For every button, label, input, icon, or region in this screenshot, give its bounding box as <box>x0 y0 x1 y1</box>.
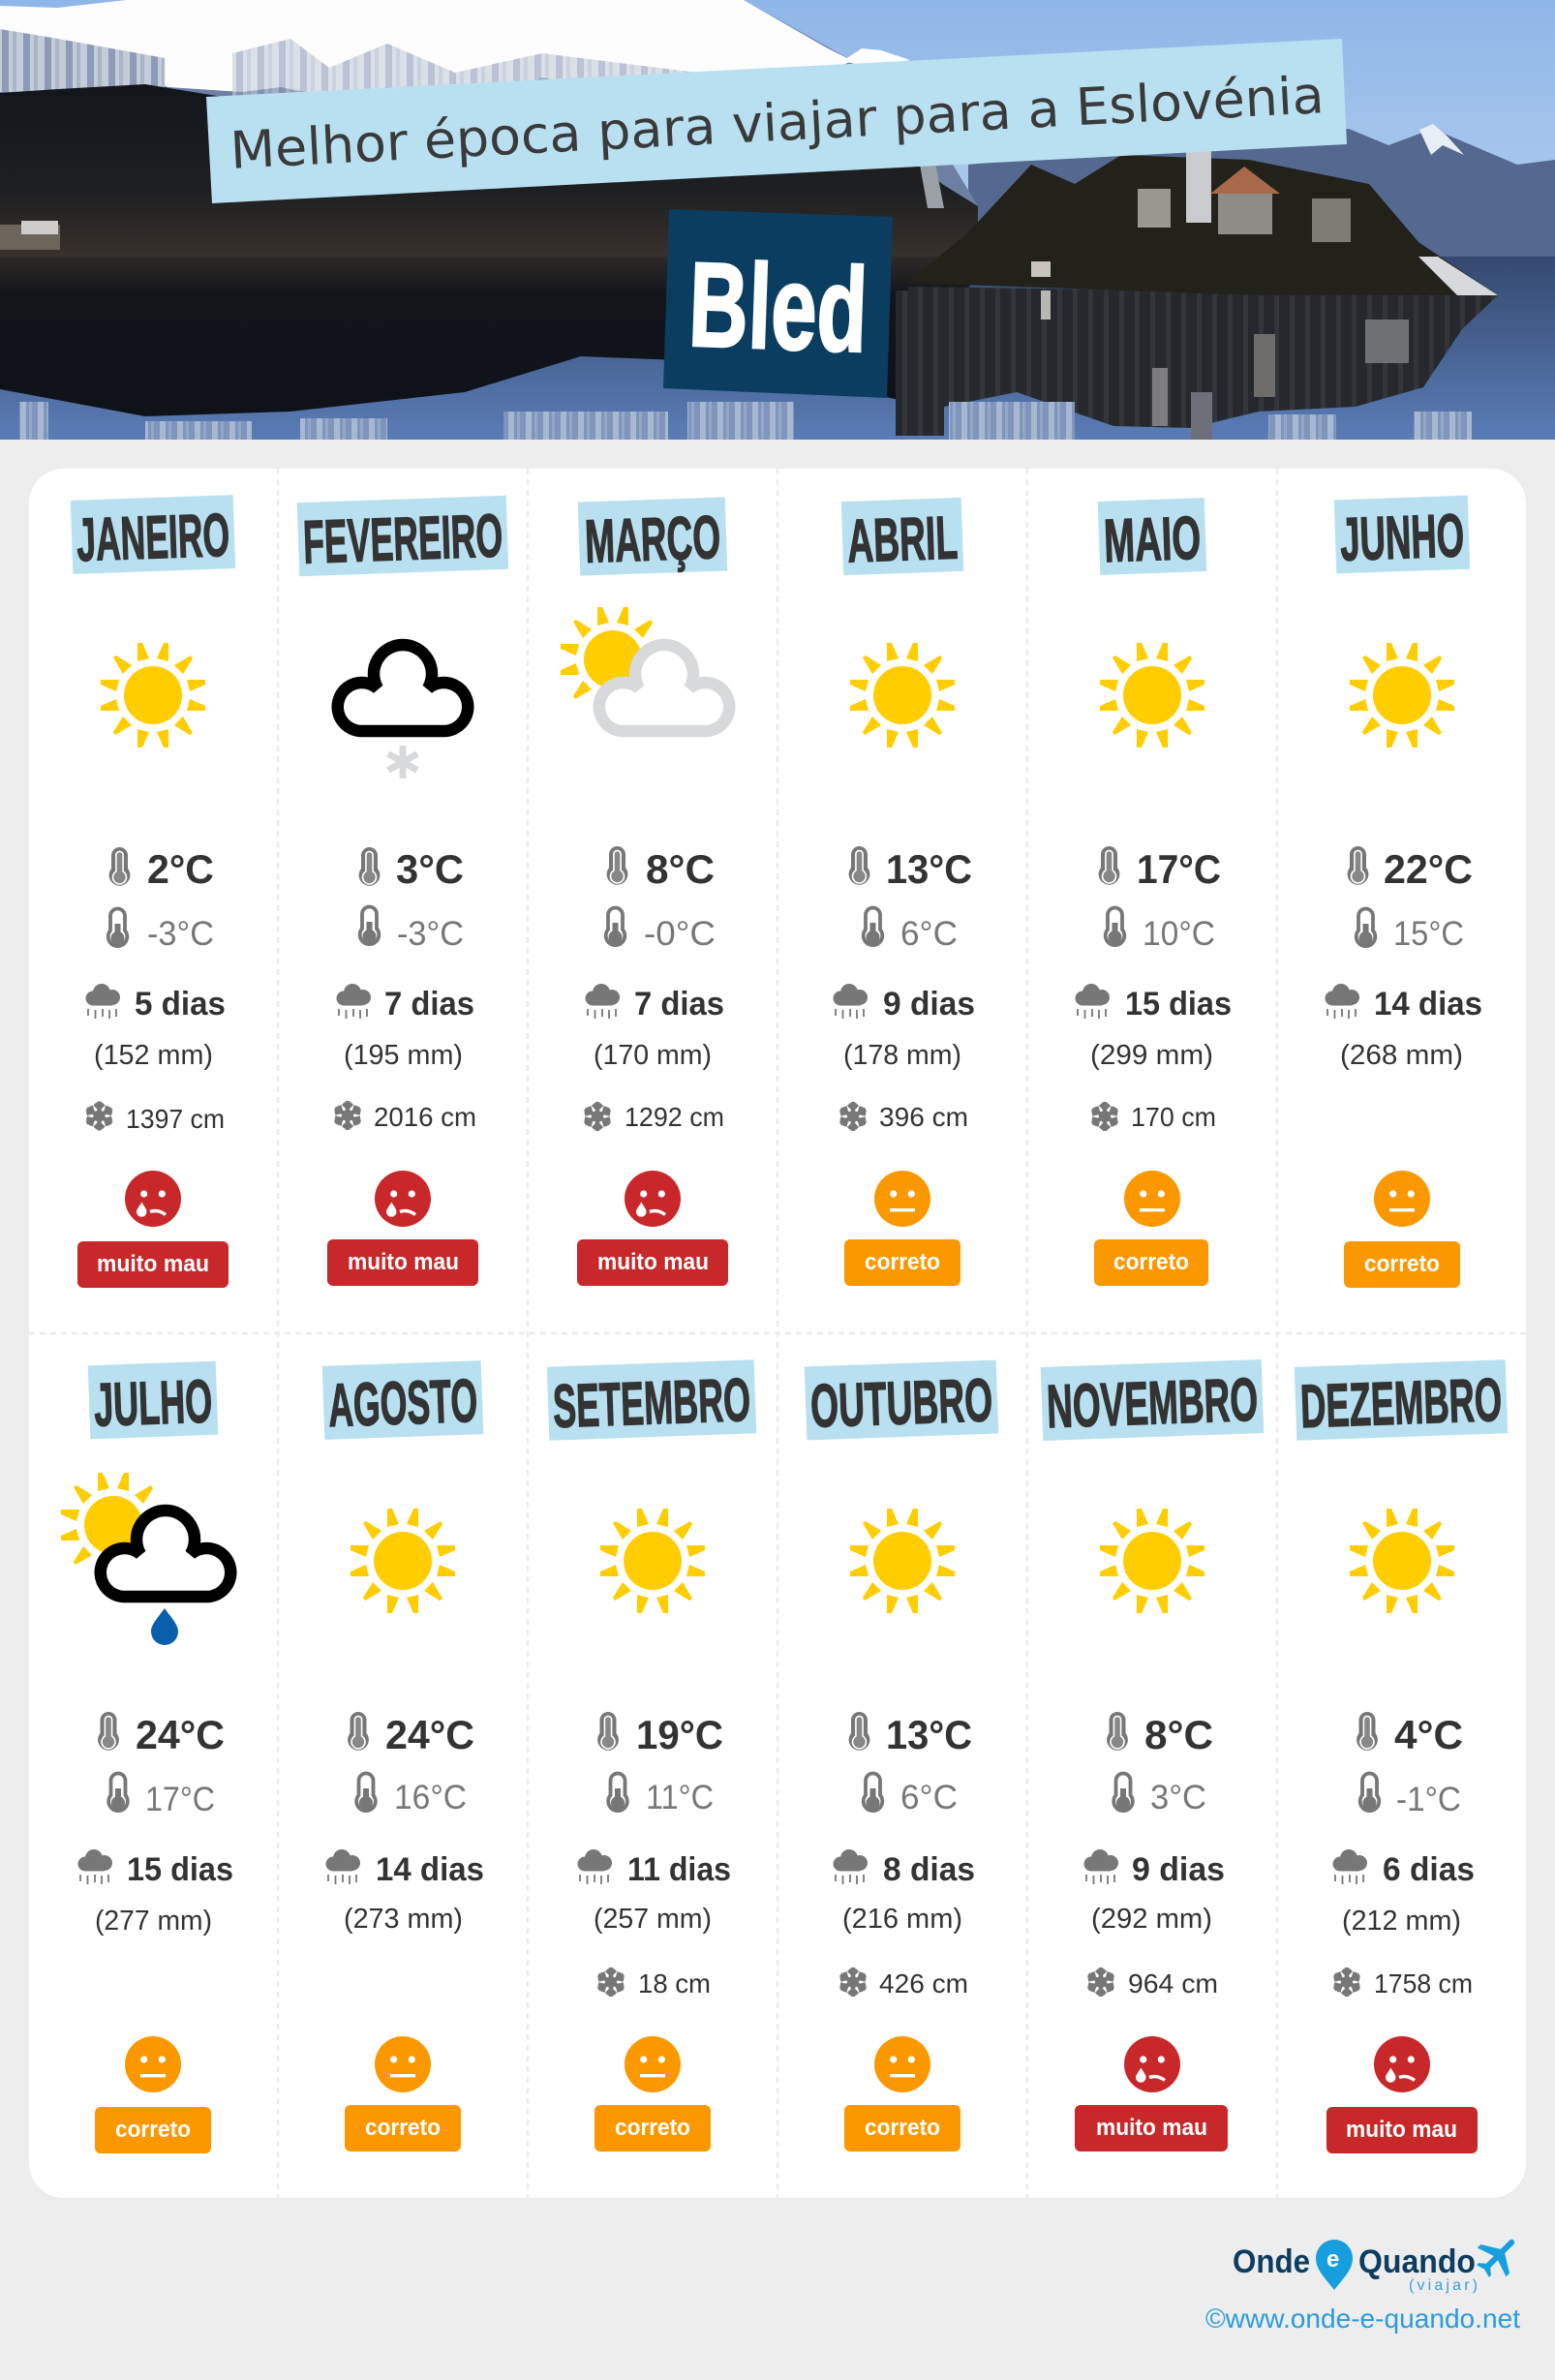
rain days: 5 dias <box>135 986 226 1022</box>
rainfall: (299 mm) <box>1090 1040 1213 1071</box>
min temperature <box>1113 1774 1206 1816</box>
rainfall: (292 mm) <box>1091 1904 1212 1935</box>
snowfall <box>84 1102 225 1134</box>
rain days <box>337 984 474 1022</box>
min temperature <box>1357 908 1464 953</box>
rain days <box>1084 1849 1225 1888</box>
min temperature: -0°C <box>644 915 716 953</box>
month label: Outubro: OUTUBRO <box>809 1366 993 1441</box>
snowfall: 1292 cm <box>625 1102 724 1132</box>
rain days <box>833 1849 975 1888</box>
max temperature <box>597 1712 723 1757</box>
min temperature <box>1360 1774 1461 1818</box>
max temperature: 4°C <box>1394 1712 1463 1757</box>
icon: sun <box>1350 643 1454 748</box>
rain days: 11 dias <box>627 1851 731 1888</box>
rating badge <box>844 2105 960 2151</box>
max temperature <box>109 846 214 892</box>
snowfall: 396 cm <box>879 1102 968 1132</box>
icon: rating face <box>125 1171 181 1227</box>
month label: Abril <box>841 498 963 576</box>
snowfall <box>838 1968 968 1999</box>
max temperature <box>1107 1712 1213 1757</box>
max temperature <box>849 846 972 892</box>
max temperature <box>849 1712 972 1757</box>
icon: sun <box>1350 1509 1454 1613</box>
icon: map pin <box>1316 2240 1353 2290</box>
rating badge <box>595 2105 711 2151</box>
month label: Maio <box>1098 498 1206 575</box>
snowfall <box>583 1102 724 1132</box>
max temperature: 17°C <box>1137 846 1221 892</box>
icon: map pin: e <box>1326 2246 1339 2273</box>
snowfall <box>838 1102 968 1132</box>
rain days: 6 dias <box>1383 1851 1475 1888</box>
rain days <box>77 1849 233 1888</box>
panel: Fevereiro <box>297 496 508 1286</box>
city name banner: Bled <box>663 209 893 398</box>
rating badge <box>1326 2107 1478 2153</box>
footer logo: Onde e Quando: Onde <box>1233 2243 1310 2280</box>
month label: Setembro: SETEMBRO <box>552 1366 751 1441</box>
max temperature: 3°C <box>396 846 464 892</box>
icon: sun <box>101 643 205 748</box>
snowfall: 426 cm <box>879 1968 968 1999</box>
header photo: Lake Bled <box>0 0 1555 440</box>
icon: rating face <box>625 2036 681 2092</box>
panel: Janeiro <box>71 495 235 1288</box>
panel: Março <box>561 497 729 1286</box>
max temperature <box>348 1712 474 1757</box>
rain days: 14 dias <box>1374 986 1482 1022</box>
rainfall: (268 mm) <box>1340 1040 1463 1071</box>
icon: rating face <box>1374 2036 1430 2092</box>
month label: Outubro <box>805 1360 998 1441</box>
snowfall <box>1090 1102 1216 1132</box>
rating badge <box>345 2105 461 2151</box>
rainfall: (273 mm) <box>344 1904 463 1935</box>
rain days: 14 dias <box>376 1851 484 1888</box>
snowfall: 170 cm <box>1131 1102 1216 1132</box>
panel: months card <box>29 469 1526 2198</box>
rain days <box>1332 1849 1475 1888</box>
rating badge: correto <box>365 2115 441 2141</box>
month label: Março <box>578 497 727 576</box>
rating badge: correto <box>865 2115 940 2141</box>
title banner: Melhor época para viajar para a Eslovénia <box>229 66 1326 181</box>
icon: sun <box>850 643 955 748</box>
min temperature: 17°C <box>145 1781 215 1818</box>
snowfall <box>1086 1968 1218 1999</box>
footer logo: Onde e Quando: Quando <box>1358 2243 1476 2280</box>
max temperature: 8°C <box>1144 1712 1213 1757</box>
max temperature <box>1099 846 1221 892</box>
icon: sun <box>600 1509 705 1613</box>
icon: rating face <box>375 1171 431 1227</box>
rating badge <box>327 1239 478 1286</box>
icon: rating face <box>874 1171 930 1227</box>
month label: Fevereiro: FEVEREIRO <box>302 502 503 577</box>
month label: Agosto: AGOSTO <box>327 1367 478 1440</box>
rating badge: correto <box>1364 1251 1440 1277</box>
min temperature: -3°C <box>397 915 464 953</box>
snowfall <box>1332 1968 1473 1999</box>
rainfall: (277 mm) <box>95 1906 212 1937</box>
rainfall: (195 mm) <box>344 1040 463 1071</box>
rain days: 8 dias <box>883 1851 975 1888</box>
icon: sun and grey cloud <box>561 607 729 731</box>
panel: Setembro <box>547 1359 756 2151</box>
rating badge: muito mau <box>97 1251 209 1277</box>
min temperature: 3°C <box>1150 1779 1206 1816</box>
min temperature: -3°C <box>147 915 214 953</box>
rain days <box>1325 984 1482 1022</box>
rating badge: correto <box>115 2117 191 2143</box>
icon: sun <box>1100 643 1204 748</box>
month label: Novembro: NOVEMBRO <box>1046 1366 1259 1441</box>
month label: Fevereiro <box>297 496 508 577</box>
icon: rating face <box>874 2036 930 2092</box>
footer logo: Onde e Quando <box>1233 2226 1528 2294</box>
max temperature: 19°C <box>636 1712 723 1757</box>
rain days <box>833 984 975 1022</box>
panel: Agosto <box>322 1360 484 2151</box>
rain days: 9 dias <box>1132 1851 1225 1888</box>
min temperature <box>356 1774 467 1816</box>
max temperature: 24°C <box>385 1712 474 1757</box>
rating badge <box>1094 1239 1208 1286</box>
max temperature: 8°C <box>646 846 715 892</box>
snowfall: 1758 cm <box>1374 1968 1473 1999</box>
rain days: 15 dias <box>1125 986 1232 1022</box>
icon: rating face <box>1124 1171 1180 1227</box>
min temperature: 11°C <box>646 1779 714 1816</box>
min temperature <box>1106 908 1215 953</box>
min temperature <box>108 908 214 953</box>
panel: Novembro <box>1041 1359 1264 2151</box>
title banner <box>206 39 1347 203</box>
min temperature <box>360 906 464 953</box>
min temperature <box>108 1774 215 1818</box>
rating badge <box>577 1239 728 1286</box>
rain days <box>1075 984 1232 1022</box>
icon: rating face <box>1374 1171 1430 1227</box>
rating badge: muito mau <box>597 1249 709 1275</box>
rating badge <box>77 1241 229 1288</box>
panel: Dezembro <box>1295 1359 1508 2153</box>
max temperature: 13°C <box>886 1712 972 1757</box>
month label: Janeiro <box>71 495 235 574</box>
min temperature <box>864 1774 958 1816</box>
month label: Novembro <box>1041 1359 1264 1441</box>
panel: Julho <box>61 1361 233 2153</box>
rating badge: muito mau <box>1346 2117 1457 2143</box>
min temperature: 6°C <box>900 1779 958 1816</box>
rain days: 9 dias <box>883 986 975 1022</box>
rainfall: (212 mm) <box>1342 1906 1461 1937</box>
min temperature: 15°C <box>1393 915 1464 953</box>
snowfall <box>596 1968 711 1999</box>
icon: rating face <box>625 1171 681 1227</box>
rating badge <box>1075 2105 1228 2151</box>
rainfall: (257 mm) <box>594 1904 712 1935</box>
icon: rating face <box>125 2036 181 2092</box>
rating badge <box>1344 1241 1460 1288</box>
panel: Outubro <box>805 1360 998 2151</box>
city name banner: Bled: Bled <box>686 238 869 378</box>
website credit: ©www.onde-e-quando.net <box>1205 2304 1520 2334</box>
rating badge: correto <box>1113 1249 1189 1275</box>
panel: Junho <box>1325 496 1482 1288</box>
icon: cloud with snow <box>338 645 468 778</box>
rain days <box>325 1849 484 1888</box>
icon: sun <box>351 1509 455 1613</box>
rating badge: muito mau <box>1096 2115 1207 2141</box>
min temperature: -1°C <box>1396 1781 1461 1818</box>
min temperature: 16°C <box>394 1779 467 1816</box>
icon: airplane <box>1469 2226 1528 2285</box>
month label: Maio: MAIO <box>1103 504 1202 575</box>
snowfall: 1397 cm <box>126 1104 225 1134</box>
max temperature: 22°C <box>1384 846 1473 892</box>
min temperature <box>606 908 716 953</box>
icon: rating face <box>1124 2036 1180 2092</box>
rating badge: muito mau <box>348 1249 459 1275</box>
min temperature <box>608 1774 714 1816</box>
max temperature <box>359 846 464 892</box>
rating badge <box>844 1239 960 1286</box>
panel: Abril <box>833 498 975 1286</box>
month label: Janeiro: JANEIRO <box>76 502 230 574</box>
max temperature: 13°C <box>886 846 972 892</box>
panel: Maio <box>1075 498 1232 1286</box>
max temperature <box>98 1712 225 1757</box>
rating badge: correto <box>865 1249 940 1275</box>
icon: sun <box>850 1509 955 1613</box>
rain days <box>85 984 226 1022</box>
rain days: 7 dias <box>384 986 474 1022</box>
snowfall: 964 cm <box>1128 1968 1218 1999</box>
month label: Março: MARÇO <box>584 503 721 576</box>
max temperature: 24°C <box>136 1712 225 1757</box>
rainfall: (178 mm) <box>843 1040 961 1071</box>
month label: Junho: JUNHO <box>1339 502 1465 574</box>
footer logo: Onde e Quando: (viajar) <box>1409 2277 1478 2294</box>
snowfall <box>333 1101 476 1132</box>
month label: Agosto <box>322 1360 483 1440</box>
max temperature: 2°C <box>147 846 214 892</box>
rain days <box>577 1849 731 1888</box>
icon: rating face <box>375 2036 431 2092</box>
month label: Setembro <box>547 1359 756 1441</box>
icon: sun <box>1100 1509 1204 1613</box>
rainfall: (170 mm) <box>594 1040 712 1071</box>
month label: Junho <box>1334 496 1470 574</box>
min temperature: 10°C <box>1143 915 1215 953</box>
snowfall: 2016 cm <box>374 1102 476 1132</box>
rainfall: (216 mm) <box>842 1904 962 1935</box>
rating badge: correto <box>615 2115 690 2141</box>
month label: Julho <box>88 1361 218 1440</box>
min temperature <box>864 908 958 953</box>
rating badge <box>95 2107 211 2153</box>
rain days: 7 dias <box>634 986 724 1022</box>
icon: sun, cloud and rain drop <box>61 1473 230 1645</box>
rainfall: (152 mm) <box>94 1040 213 1071</box>
max temperature <box>1357 1712 1463 1757</box>
snowfall: 18 cm <box>638 1968 711 1999</box>
month label: Abril: ABRIL <box>846 504 959 575</box>
rain days <box>585 984 724 1022</box>
month label: Julho: JULHO <box>93 1367 213 1440</box>
max temperature <box>607 846 715 892</box>
min temperature: 6°C <box>900 915 958 953</box>
rain days: 15 dias <box>127 1851 233 1888</box>
